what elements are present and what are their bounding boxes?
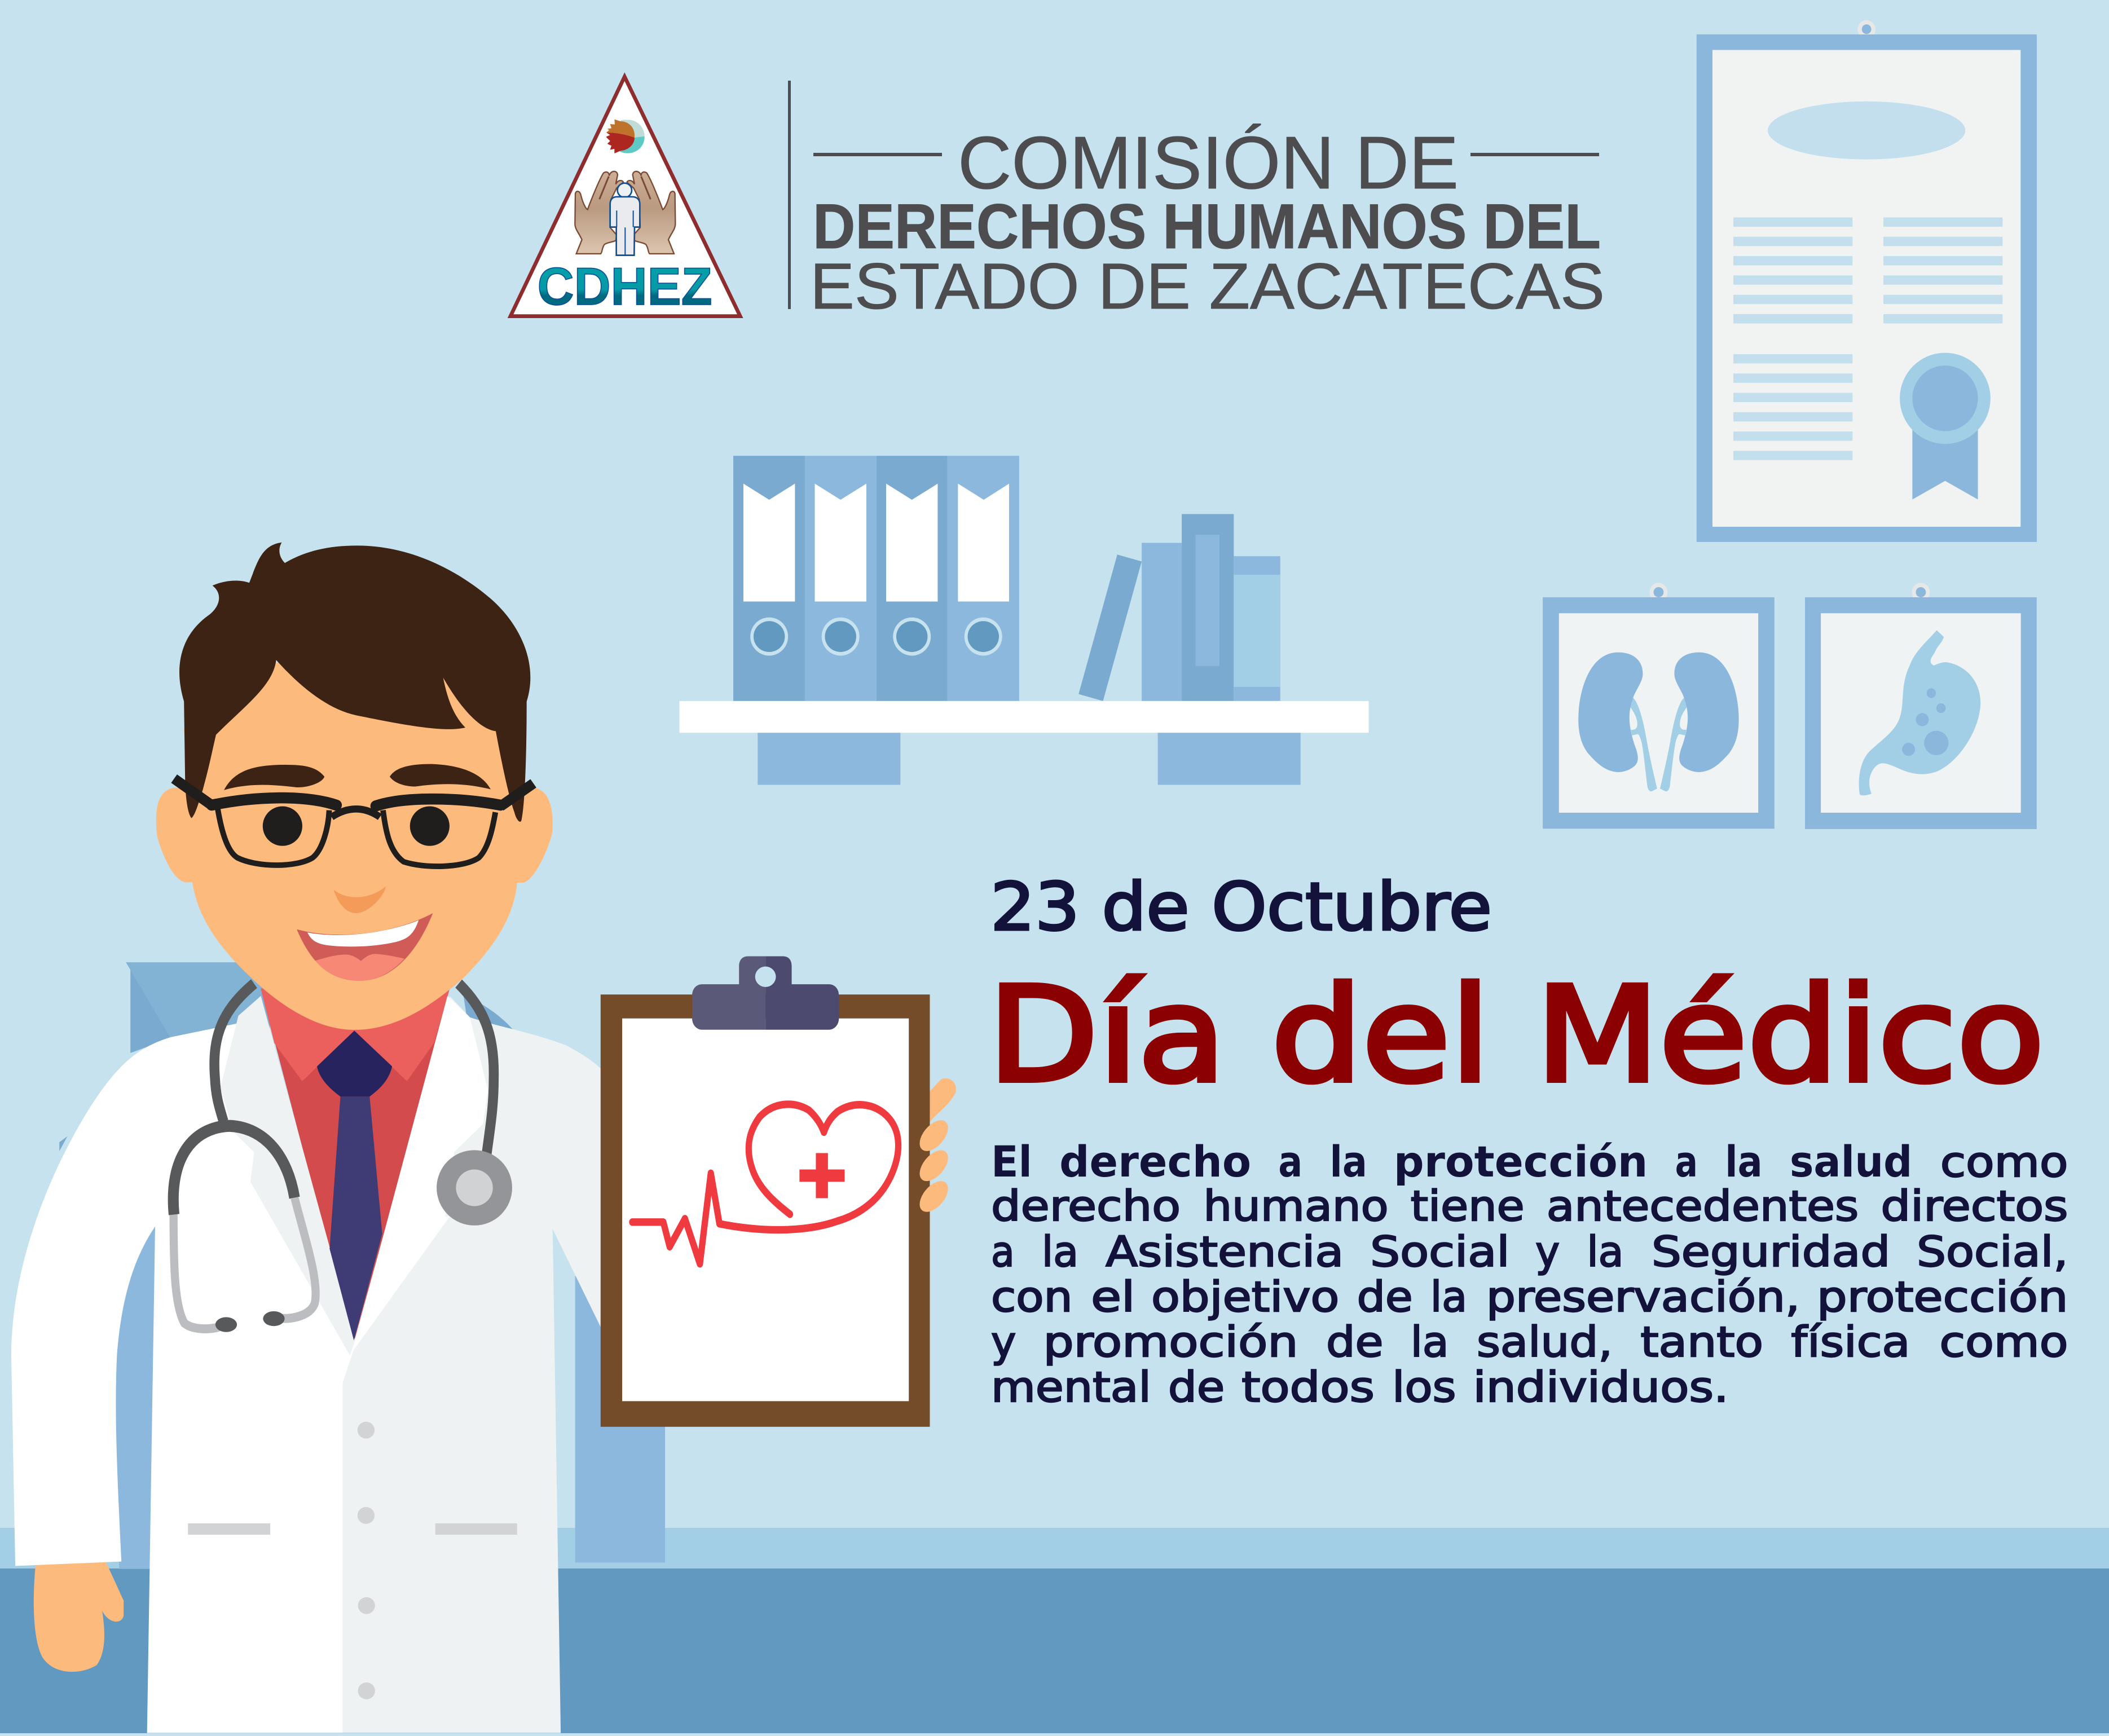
body paragraph: a xyxy=(1675,1136,1698,1187)
face xyxy=(184,652,526,1030)
body paragraph: salud xyxy=(1790,1136,1912,1187)
body paragraph: la xyxy=(1042,1228,1078,1276)
stethoscope xyxy=(173,984,512,1332)
coat right front xyxy=(342,996,605,1733)
chair behind doctor xyxy=(59,962,665,1569)
logo: CDHEZ triangle xyxy=(510,77,740,316)
body paragraph: humano xyxy=(1203,1182,1389,1231)
body paragraph: la xyxy=(1587,1228,1623,1276)
body paragraph: como xyxy=(1940,1138,2068,1187)
body paragraph: y xyxy=(991,1318,1016,1367)
body paragraph: preservación, xyxy=(1486,1273,1800,1321)
body paragraph: de xyxy=(1357,1273,1413,1321)
tie xyxy=(317,1030,392,1341)
body paragraph: física xyxy=(1791,1318,1910,1367)
wall skirting band xyxy=(0,1528,2109,1568)
body paragraph: protección xyxy=(1394,1136,1648,1187)
body paragraph: directos xyxy=(1881,1182,2068,1231)
body paragraph: Social xyxy=(1370,1228,1510,1276)
bookshelf xyxy=(679,456,1368,785)
body paragraph: todos xyxy=(1241,1363,1375,1412)
body paragraph: antecedentes xyxy=(1547,1182,1859,1231)
clipboard board xyxy=(601,994,930,1427)
body paragraph: la xyxy=(1725,1136,1763,1187)
date: 23 de Octubre xyxy=(990,869,1492,945)
logo person figure xyxy=(610,183,640,255)
body paragraph: Asistencia xyxy=(1106,1228,1344,1276)
certificate medal xyxy=(1900,353,1991,500)
stomach picture xyxy=(1805,583,2037,829)
ears xyxy=(156,788,553,883)
glasses xyxy=(174,779,534,866)
thumb xyxy=(927,1078,956,1125)
logo left hand xyxy=(575,171,623,254)
certificate frame xyxy=(1697,20,2037,542)
logo right hand xyxy=(627,171,675,254)
coat left front and sleeve xyxy=(11,996,355,1733)
body paragraph: tiene xyxy=(1411,1182,1525,1231)
doctor figure xyxy=(11,543,665,1733)
body paragraph: individuos. xyxy=(1473,1363,1729,1412)
coat pockets xyxy=(188,1523,517,1535)
body paragraph: mental xyxy=(991,1363,1151,1412)
header title: COMISIÓN DE xyxy=(958,121,1459,204)
hair xyxy=(179,543,530,822)
heartbeat heart icon xyxy=(632,1104,899,1264)
fingers xyxy=(915,1114,953,1218)
body paragraph: el xyxy=(1091,1273,1135,1321)
body paragraph: Seguridad xyxy=(1652,1228,1890,1276)
body paragraph: la xyxy=(1329,1136,1367,1187)
right lapel xyxy=(350,996,488,1355)
body paragraph: protección xyxy=(1817,1273,2068,1321)
body paragraph: la xyxy=(1430,1273,1467,1321)
body paragraph: a xyxy=(1278,1136,1302,1187)
shelf board xyxy=(679,701,1368,785)
logo wordmark: CDHEZ xyxy=(538,257,712,316)
binders xyxy=(733,456,1019,701)
left hand xyxy=(34,1558,124,1672)
kidney picture xyxy=(1543,583,1775,829)
framed organ pictures xyxy=(1543,583,2037,829)
body paragraph: Social, xyxy=(1917,1228,2068,1276)
body paragraph: la xyxy=(1411,1318,1448,1367)
logo sun and moon xyxy=(606,120,645,153)
body paragraph: a xyxy=(991,1228,1015,1276)
body paragraph: y xyxy=(1535,1228,1560,1276)
body paragraph: derecho xyxy=(1059,1136,1251,1187)
body paragraph xyxy=(991,1136,2068,1412)
body paragraph: como xyxy=(1940,1318,2068,1367)
header title: DERECHOS HUMANOS DEL xyxy=(813,191,1601,262)
nose xyxy=(333,886,386,913)
doctor body xyxy=(11,962,665,1733)
header title: ESTADO DE ZACATECAS xyxy=(810,250,1605,323)
clipboard held by doctor xyxy=(601,956,956,1427)
header divider xyxy=(788,81,791,309)
body paragraph: de xyxy=(1326,1318,1384,1367)
shirt and collar xyxy=(261,989,450,1350)
body paragraph: derecho xyxy=(991,1182,1181,1231)
floor xyxy=(0,1568,2109,1733)
main heading: Día del Médico xyxy=(988,959,2044,1111)
body paragraph: de xyxy=(1168,1363,1225,1412)
body paragraph: El xyxy=(991,1136,1032,1187)
left lapel xyxy=(221,996,355,1355)
books xyxy=(1078,514,1280,701)
body paragraph: salud, xyxy=(1477,1318,1613,1367)
mouth xyxy=(297,913,433,981)
eyes xyxy=(263,807,450,846)
body paragraph: con xyxy=(991,1273,1073,1321)
clipboard clip xyxy=(692,956,839,1030)
body paragraph: tanto xyxy=(1640,1318,1763,1367)
body paragraph: los xyxy=(1392,1363,1456,1412)
doctor head xyxy=(156,543,553,1030)
clipboard paper xyxy=(622,1019,909,1401)
header title xyxy=(810,121,1605,323)
body paragraph: promoción xyxy=(1043,1318,1298,1367)
coat buttons xyxy=(358,1422,375,1699)
eyebrows xyxy=(224,764,491,790)
body paragraph: objetivo xyxy=(1151,1273,1339,1321)
